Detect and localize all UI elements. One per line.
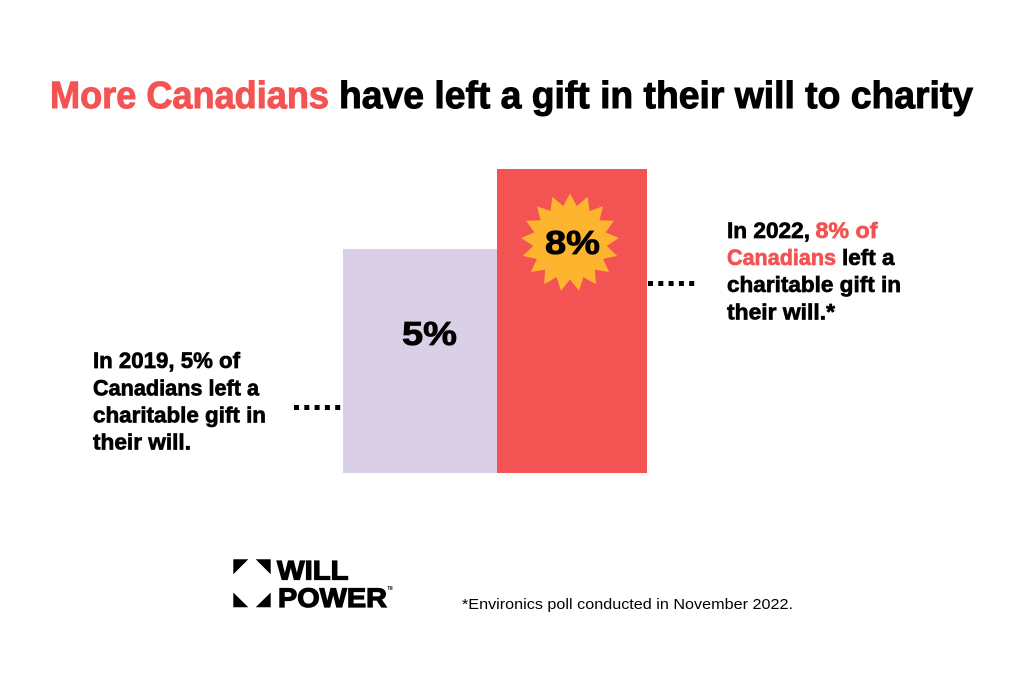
text: 2022 note: In 2022, <box>727 218 810 243</box>
text: 2019 note: their will. <box>93 430 191 454</box>
icon: logo corner triangles <box>233 559 271 607</box>
text: 2022 note: left a <box>842 245 895 270</box>
logo: Will Power: POWER <box>278 583 387 613</box>
title <box>50 75 973 117</box>
text: 2019 note: Canadians left a <box>93 376 260 400</box>
text: 2019 note: In 2019, 5% of <box>93 348 241 373</box>
bar chart <box>343 169 647 473</box>
logo: Will Power: TM <box>388 586 392 592</box>
footnote: *Environics poll conducted in November 2022. <box>462 597 793 613</box>
bar: 2019 <box>343 249 497 473</box>
text: 2022 note: their will.* <box>727 300 835 324</box>
logo: Will Power: WILL <box>277 556 348 586</box>
badge: 8% starburst: 8% <box>545 224 600 261</box>
text: 2022 note: charitable gift in <box>727 272 901 297</box>
bar: 2022 <box>497 169 647 473</box>
logo: Will Power <box>233 556 392 613</box>
text: 2019 note: charitable gift in <box>93 402 266 428</box>
title: More Canadians <box>50 75 329 117</box>
badge: 8% starburst <box>521 194 619 291</box>
text: 2022 note <box>727 218 901 324</box>
leader dots: 2022 <box>648 281 694 286</box>
title: have left a gift in their will to charity <box>339 75 973 117</box>
text: 2022 note: Canadians <box>727 245 836 270</box>
text: 2022 note: 8% of <box>816 218 878 243</box>
text: 2019 note <box>93 348 266 454</box>
bar: 2019: 5% <box>402 315 457 352</box>
leader dots: 2019 <box>294 405 340 410</box>
